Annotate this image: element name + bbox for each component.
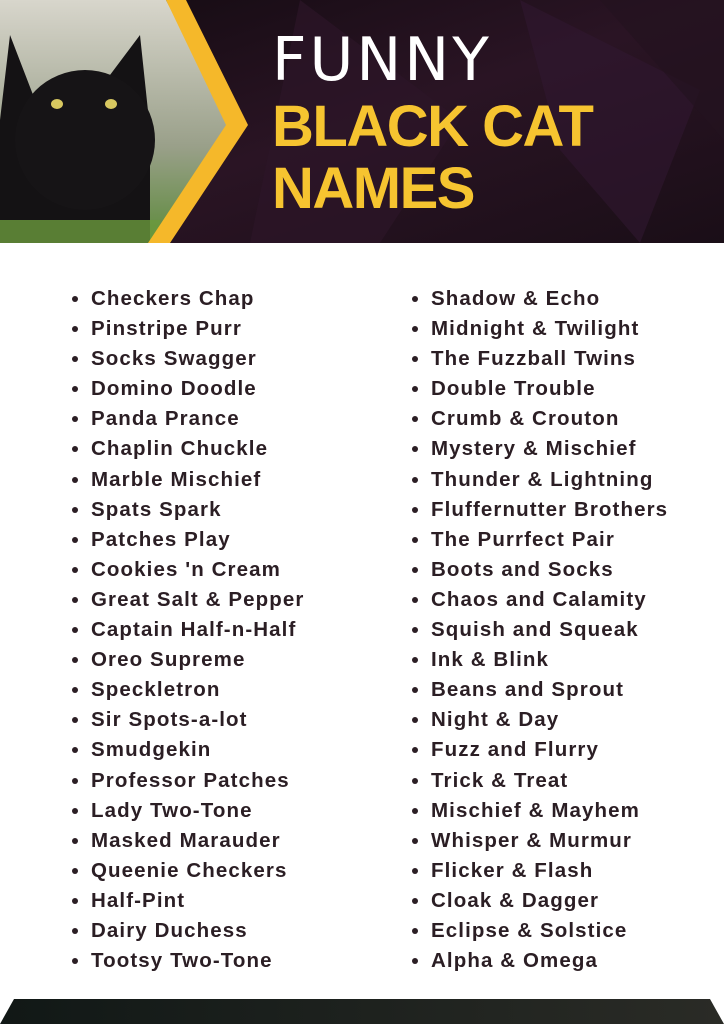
list: left column: Dairy Duchess — [91, 919, 248, 942]
list: right column: The Fuzzball Twins — [431, 347, 636, 370]
list: right column: Trick & Treat — [431, 768, 568, 792]
list: right column: Mischief & Mayhem — [431, 799, 640, 822]
list: right column: Midnight & Twilight — [431, 317, 639, 340]
list: left column: Queenie Checkers — [91, 859, 288, 882]
list: right column: Night & Day — [431, 708, 559, 731]
list: left column: Great Salt & Pepper — [91, 588, 304, 611]
icon: yellow chevron — [148, 0, 248, 243]
title — [272, 25, 594, 221]
list: left column: Pinstripe Purr — [91, 317, 242, 340]
list: right column: Cloak & Dagger — [431, 889, 599, 912]
title: NAMES — [272, 156, 474, 221]
list: right column: Thunder & Lightning — [431, 468, 653, 491]
list: right column: Eclipse & Solstice — [431, 919, 627, 942]
list: right column: The Purrfect Pair — [431, 528, 615, 551]
list: left column: Socks Swagger — [91, 347, 257, 370]
list: right column: Fuzz and Flurry — [431, 738, 599, 761]
list: left column: Speckletron — [91, 678, 220, 701]
list: left column: Sir Spots-a-lot — [91, 708, 248, 731]
list: right column: Fluffernutter Brothers — [431, 498, 668, 521]
list: right column: Crumb & Crouton — [431, 407, 619, 430]
list: left column: Domino Doodle — [91, 377, 257, 400]
list: left column: Lady Two-Tone — [91, 799, 253, 822]
list: right column: Alpha & Omega — [431, 949, 598, 972]
list: right column: Double Trouble — [431, 377, 596, 400]
list: right column — [412, 287, 668, 972]
list: left column — [72, 287, 304, 972]
list: left column: Chaplin Chuckle — [91, 437, 268, 460]
list: right column: Boots and Socks — [431, 558, 614, 581]
list: left column: Oreo Supreme — [91, 648, 245, 671]
list: left column: Professor Patches — [91, 768, 290, 792]
list: left column: Spats Spark — [91, 498, 222, 521]
list: left column: Captain Half-n-Half — [91, 618, 296, 641]
title: BLACK CAT — [272, 94, 592, 159]
list: left column: Masked Marauder — [91, 829, 281, 852]
list: left column: Cookies 'n Cream — [91, 558, 281, 581]
footer bar — [0, 999, 724, 1024]
header banner — [0, 0, 724, 243]
list: right column: Beans and Sprout — [431, 678, 624, 701]
list: right column: Squish and Squeak — [431, 618, 639, 641]
title: FUNNY — [272, 25, 492, 95]
list: left column: Half-Pint — [91, 889, 185, 912]
list: right column: Mystery & Mischief — [431, 437, 637, 460]
list: right column: Ink & Blink — [431, 648, 549, 671]
list: right column: Flicker & Flash — [431, 859, 593, 882]
list: left column: Marble Mischief — [91, 468, 261, 491]
list: left column: Tootsy Two-Tone — [91, 949, 273, 972]
list: left column: Smudgekin — [91, 738, 211, 761]
list: right column: Chaos and Calamity — [431, 588, 647, 611]
photo: black cat — [0, 0, 232, 243]
list: right column: Whisper & Murmur — [431, 829, 632, 852]
list: left column: Checkers Chap — [91, 287, 255, 310]
list: right column: Shadow & Echo — [431, 287, 600, 310]
list: left column: Patches Play — [91, 528, 231, 551]
list: left column: Panda Prance — [91, 407, 240, 430]
